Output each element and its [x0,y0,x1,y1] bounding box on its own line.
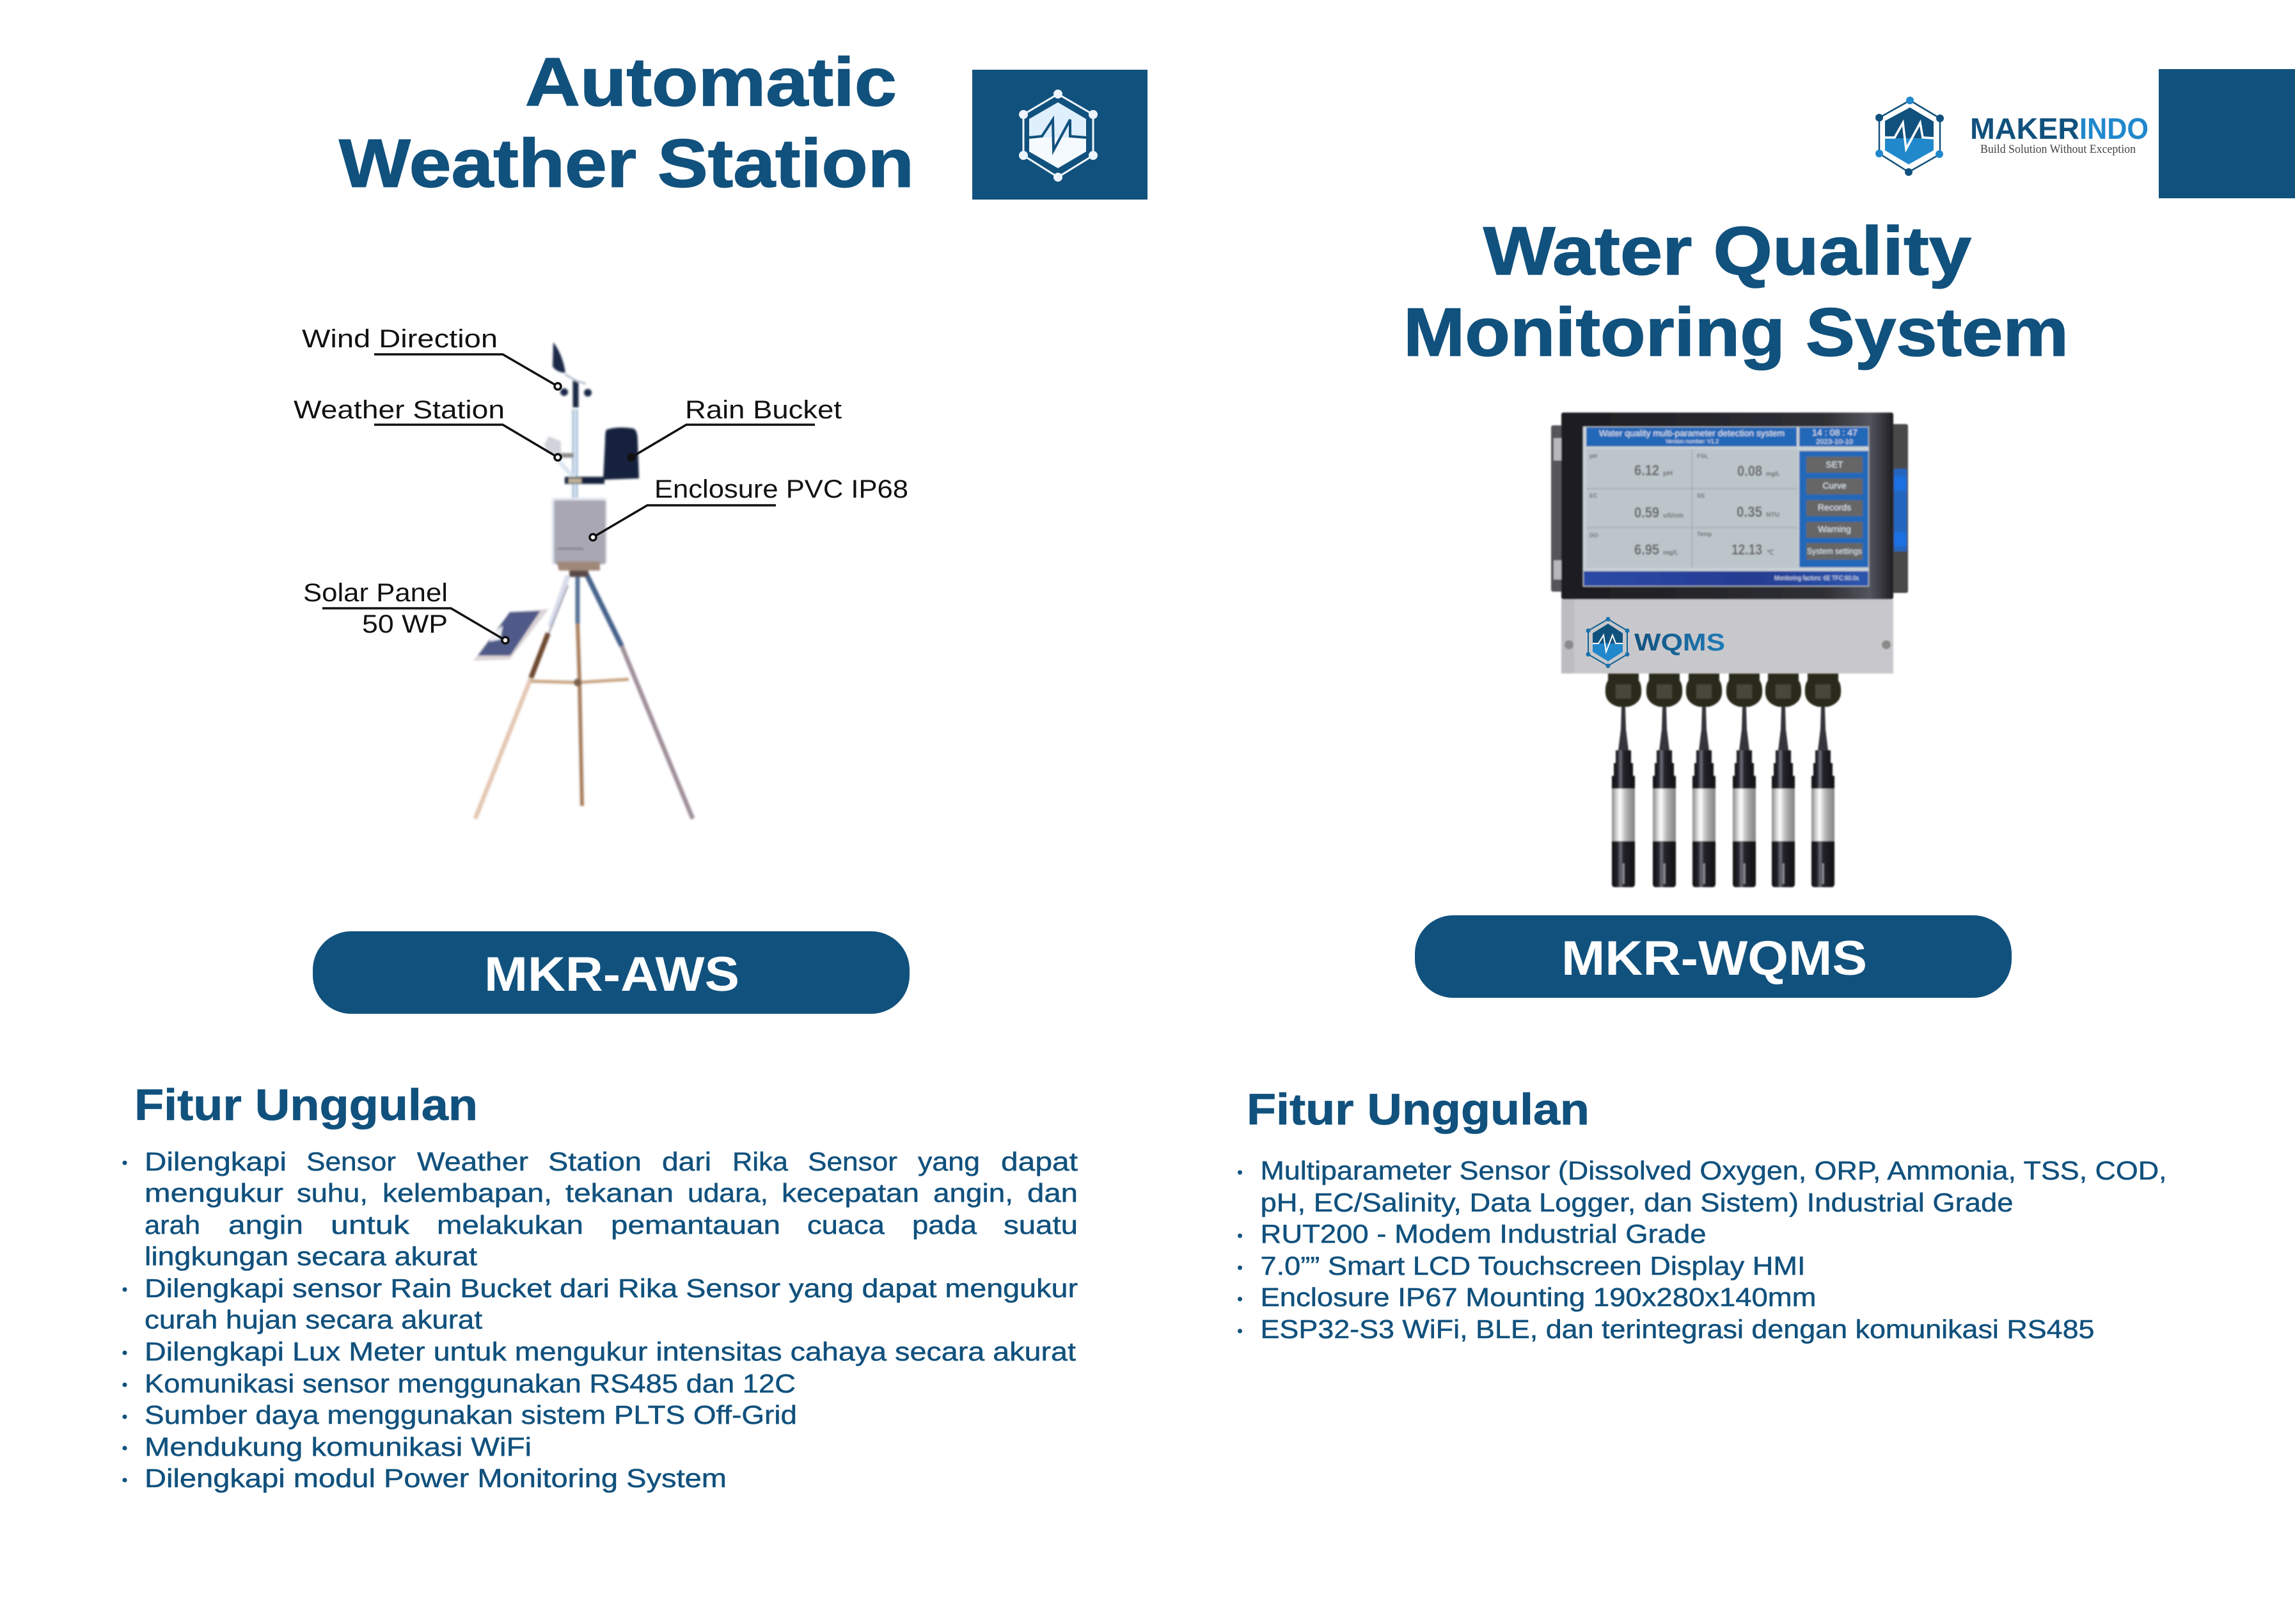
callout: rain bucket: Rain Bucket [685,396,842,424]
logo: makerindo [1875,97,2149,176]
bullet list: AWS features: curah hujan secara akurat [145,1305,483,1334]
controller housing: Temp [1697,531,1712,537]
callout: enclosure pvc ip68 [590,475,908,540]
controller housing: pH [1589,453,1597,459]
bullet list: AWS features: Dilengkapi modul Power Monitoring System [145,1463,727,1493]
controller housing: 12.13 [1731,541,1762,558]
bullet list: WQMS features: Multiparameter Sensor (Dissolved Oxygen, ORP, Ammonia, TSS, COD, [1260,1156,2167,1185]
controller housing [1551,413,1908,674]
bullet list: AWS features: Weather [417,1147,528,1176]
bullet list: AWS features: Sensor [808,1147,897,1176]
bullet list: AWS features: angin, [933,1178,1013,1208]
bullet list: AWS features: Sensor [306,1147,396,1176]
controller housing: 14 : 08 : 47 [1812,427,1857,438]
bullet list: AWS features: cuaca [807,1210,885,1240]
bullet list: AWS features: Dilengkapi Lux Meter untuk mengukur intensitas cahaya secara akurat [145,1337,1077,1366]
bullet list: AWS features: arah [145,1210,200,1240]
bullet list: AWS features: yang [918,1147,980,1176]
badge: MKR-WQMS: MKR-WQMS [1561,931,1867,986]
bullet list: AWS features: dapat [1001,1147,1078,1176]
controller housing: 0.35 [1737,503,1762,520]
controller housing: System settings [1807,546,1862,556]
bullet list: AWS features: pada [912,1210,977,1240]
bullet list: WQMS features: 7.0”” Smart LCD Touchscreen Display HMI [1260,1251,1805,1281]
callout: rain bucket [628,396,842,461]
controller housing: 0.59 [1634,504,1659,521]
callout: weather station [294,396,561,461]
logo: makerindo: MAKER [1970,112,2079,145]
callout: weather station: Weather Station [294,396,505,424]
title: automatic weather station: Weather Station [339,125,914,201]
controller housing: pH [1663,470,1673,477]
callout: enclosure pvc ip68: Enclosure PVC IP68 [654,475,908,503]
bullet list: AWS features: Komunikasi sensor menggunakan RS485 dan 12C [145,1369,796,1398]
heading: fitur unggulan left: Fitur Unggulan [134,1080,478,1130]
controller housing: FGL [1697,453,1708,459]
controller housing: Version number: V1.2 [1666,438,1719,445]
panel: automatic weather station [123,43,1148,1493]
bullet list: WQMS features: ESP32-S3 WiFi, BLE, dan terintegrasi dengan komunikasi RS485 [1260,1314,2094,1344]
logo: makerindo: INDO [2079,112,2149,145]
controller housing: mg/L [1663,549,1678,556]
controller housing: Records [1818,502,1851,512]
bullet list: AWS features: tekanan [565,1178,674,1208]
panel: water quality monitoring system [1238,69,2295,1344]
controller housing: 6.12 [1634,462,1659,478]
bullet list: WQMS features: RUT200 - Modem Industrial Grade [1260,1219,1707,1249]
controller housing: mg/L [1766,471,1780,478]
decorative corner square [2159,69,2295,198]
controller housing: Water quality multi-parameter detection system [1599,428,1785,438]
photo: WQMS controller with probes [1551,413,1908,887]
controller housing: SS [1697,493,1705,499]
bullet list: WQMS features [1238,1156,2167,1344]
bullet list: AWS features: suatu [1004,1210,1078,1240]
bullet list: AWS features: lingkungan secara akurat [145,1242,478,1271]
bullet list: AWS features: Dilengkapi sensor Rain Bucket dari Rika Sensor yang dapat mengukur [145,1273,1078,1303]
bullet list: AWS features: angin [228,1210,303,1240]
bullet list: AWS features: Station [548,1147,642,1176]
title: water quality monitoring system: Monitoring System [1403,294,2069,370]
title: water quality monitoring system [1403,212,2069,370]
logo: makerindo: Build Solution Without Exception [1980,143,2136,156]
bullet list: AWS features: kelembapan, [382,1178,552,1208]
title: automatic weather station: Automatic [525,43,897,120]
controller housing: DO [1589,532,1598,539]
bullet list: AWS features: Dilengkapi [145,1147,287,1176]
bullet list: AWS features: Sumber daya menggunakan sistem PLTS Off-Grid [145,1400,797,1430]
icon: header square with hexagon logo [972,70,1148,200]
logo: WQMS on housing: WQMS [1634,629,1725,656]
controller housing: 0.08 [1737,462,1762,479]
controller housing: ℃ [1767,549,1774,556]
callout: wind direction [302,325,561,390]
badge: MKR-WQMS [1415,915,2012,998]
bullet list: AWS features: Mendukung komunikasi WiFi [145,1432,532,1462]
bullet list: AWS features: mengukur [145,1178,283,1208]
logo: WQMS on housing [1586,617,1725,668]
bullet list: AWS features: untuk [331,1210,410,1240]
bullet list: AWS features: udara, [688,1178,768,1208]
bullet list: AWS features: dari [662,1147,711,1176]
callout: solar panel 50 wp [303,579,509,643]
bullet list: AWS features: pemantauan [611,1210,780,1240]
controller housing: 6.95 [1634,541,1659,558]
bullet list: WQMS features: Enclosure IP67 Mounting 190x280x140mm [1260,1282,1817,1312]
callout: solar panel 50 wp: Solar Panel [303,579,448,607]
bullet list: AWS features [123,1147,1078,1493]
bullet list: AWS features: melakukan [437,1210,583,1240]
bullet list: AWS features: dan [1027,1178,1078,1208]
badge: MKR-AWS: MKR-AWS [484,947,739,1002]
controller housing: Monitoring factors: 6E TFC:60.0s [1774,575,1859,582]
controller housing: NTU [1766,512,1779,519]
controller housing: SET [1826,459,1843,469]
title: automatic weather station [339,43,914,201]
photo: weather station on tripod [473,342,693,819]
callout: solar panel 50 wp: 50 WP [362,610,448,638]
badge: MKR-AWS [313,931,910,1014]
controller housing: Warning [1818,524,1851,534]
bullet list: AWS features: kecepatan [782,1178,919,1208]
title: water quality monitoring system: Water Quality [1483,212,1971,289]
bullet list: AWS features: Rika [732,1147,788,1176]
controller housing: EC [1589,493,1598,499]
bullet list: AWS features: suhu, [297,1178,368,1208]
sensor probes [1605,674,1841,887]
bullet list: WQMS features: pH, EC/Salinity, Data Logger, dan Sistem) Industrial Grade [1260,1188,2014,1217]
controller housing: 2023-10-10 [1816,438,1853,446]
controller housing: Curve [1822,480,1847,491]
callout: wind direction: Wind Direction [302,325,498,353]
heading: fitur unggulan right: Fitur Unggulan [1247,1085,1589,1134]
controller housing: uS/cm [1663,512,1684,519]
